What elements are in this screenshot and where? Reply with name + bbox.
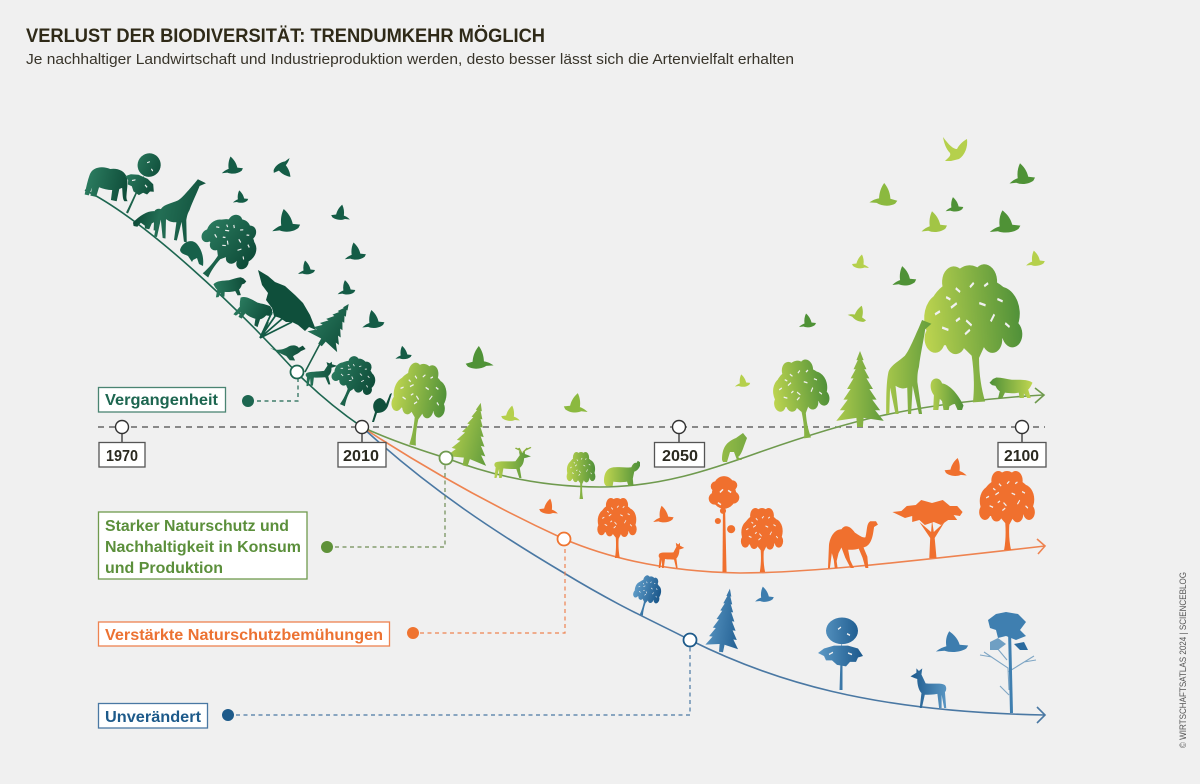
- title: VERLUST DER BIODIVERSITÄT: TRENDUMKEHR MÖGLICH: [26, 26, 545, 47]
- leader: orange scenario to curve: [407, 532, 570, 639]
- icon: bird: [936, 631, 968, 652]
- icon: acacia tree: [258, 270, 316, 338]
- green scenario trees and animals: [385, 262, 1032, 499]
- credit: © WIRTSCHAFTSATLAS 2024 | SCIENCEBLOG: [1178, 572, 1188, 748]
- blue scenario curve: [362, 427, 1045, 723]
- icon: giraffe: [886, 320, 931, 414]
- icon: bird: [653, 506, 674, 522]
- icon: stag: [494, 447, 531, 478]
- leader: blue scenario to curve: [222, 634, 696, 721]
- past scenario: dark green trees and animals: [85, 147, 392, 422]
- icon: tree: [628, 573, 665, 619]
- icon: kangaroo: [267, 344, 306, 361]
- label: Starker Naturschutz: und Produktion: [105, 560, 223, 577]
- milestone: 2010: 2010: [343, 448, 379, 465]
- blue scenario trees and animals: [628, 573, 1036, 713]
- icon: giraffe: [154, 173, 206, 244]
- icon: hippo: [604, 461, 640, 486]
- icon: conifer: [705, 586, 746, 654]
- milestone: 2050: 2050: [662, 448, 698, 465]
- icon: double-crown tree: [112, 147, 168, 219]
- milestone: 2050: [654, 420, 704, 467]
- label: Vergangenheit: Vergangenheit: [105, 392, 218, 409]
- milestone: 1970: [99, 420, 145, 467]
- label: Verstärkte Naturschutzbemühungen: [98, 622, 390, 646]
- icon: bird: [539, 499, 558, 514]
- label: Unverändert: [98, 704, 208, 728]
- icon: elephant: [85, 164, 134, 204]
- icon: lion: [232, 292, 275, 330]
- label: Starker Naturschutz: Nachhaltigkeit in Konsum: [105, 539, 301, 556]
- icon: conifer: [836, 351, 884, 427]
- label: Vergangenheit: [98, 388, 226, 412]
- icon: tree: [385, 360, 451, 449]
- icon: tree: [741, 508, 783, 572]
- icon: round tree: [322, 351, 382, 414]
- icon: bare tree: [980, 612, 1036, 713]
- icon: acacia: [892, 500, 963, 558]
- icon: ostrich: [372, 393, 392, 422]
- milestone: 2100: 2100: [1004, 448, 1039, 465]
- icon: tree: [979, 471, 1035, 550]
- icon: large tree: [920, 262, 1027, 405]
- milestone: 2100: [998, 420, 1046, 467]
- milestone: 2010: [338, 420, 386, 467]
- icon: tree: [818, 617, 863, 690]
- past trend curve: [85, 190, 362, 427]
- orange scenario curve: [362, 427, 1045, 573]
- leader: Vergangenheit to curve: [242, 366, 304, 407]
- icon: deer: [659, 543, 684, 568]
- icon: antelope: [305, 361, 339, 386]
- icon: bird: [755, 587, 774, 602]
- icon: tree: [597, 498, 637, 558]
- milestone: 1970: 1970: [106, 448, 138, 465]
- label: Starker Naturschutz: Starker Naturschutz und: [105, 518, 289, 535]
- icon: big cat: [990, 377, 1032, 398]
- icon: bear: [180, 241, 203, 266]
- flock of light green birds: [463, 137, 1045, 421]
- flock of dark green birds: [222, 156, 412, 359]
- icon: camel: [828, 521, 878, 568]
- icon: gorilla: [931, 379, 964, 410]
- icon: large tree: [183, 204, 269, 292]
- icon: wolf: [213, 277, 247, 297]
- orange scenario trees and animals: [539, 458, 1035, 572]
- icon: fern: [305, 294, 364, 372]
- leader: green scenario to curve: [321, 452, 452, 553]
- icon: deer: [911, 668, 946, 708]
- green scenario curve: [362, 388, 1044, 487]
- icon: small tree: [567, 452, 595, 499]
- icon: tree: [769, 357, 835, 442]
- subtitle: Je nachhaltiger Landwirtschaft und Industrieproduktion werden, desto besser lässt sich die Artenvielfalt erhalten: [26, 51, 794, 68]
- label: Starker Naturschutz: [98, 512, 307, 579]
- icon: conifer: [445, 398, 501, 471]
- icon: monkey: [132, 204, 165, 232]
- label: Verstärkte Naturschutzbemühungen: Verstärkte Naturschutzbemühungen: [105, 627, 383, 644]
- icon: wolf: [722, 433, 747, 462]
- icon: bird: [945, 458, 967, 476]
- time axis dashed line: [98, 426, 1045, 428]
- label: Unverändert: Unverändert: [105, 709, 201, 726]
- icon: tall tree: [709, 476, 739, 572]
